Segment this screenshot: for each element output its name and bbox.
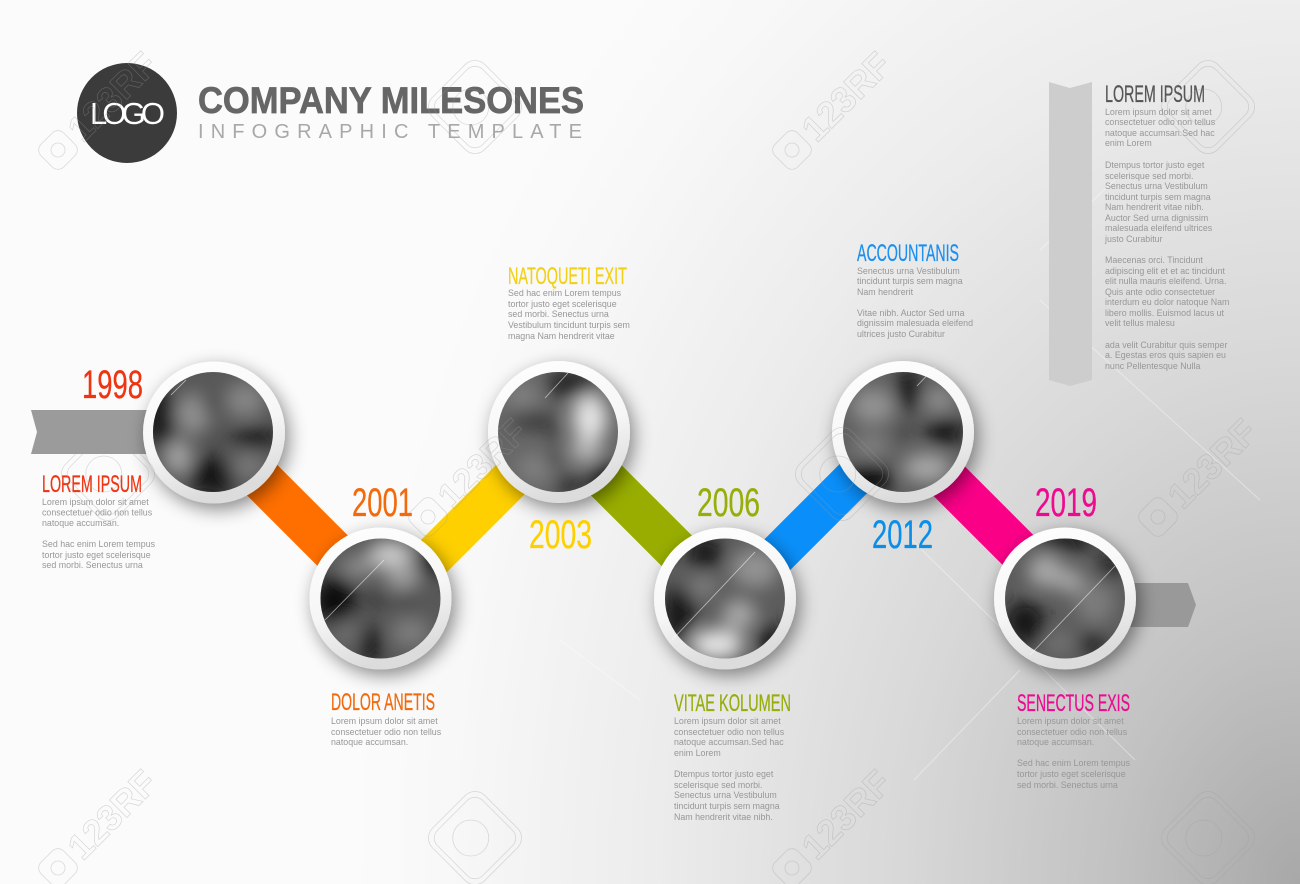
text block: accountanis: dignissim malesuada eleifend xyxy=(857,318,973,328)
text block: lorem ipsum: consectetuer odio non tellus xyxy=(42,508,153,518)
bar: green xyxy=(550,424,725,599)
text block: vitae kolumen: scelerisque sed morbi. xyxy=(674,780,762,790)
side body text: velit tellus malesu xyxy=(1105,318,1175,328)
side body text: scelerisque sed morbi. xyxy=(1105,171,1193,181)
text block: senectus exis: Sed hac enim Lorem tempus xyxy=(1017,758,1131,768)
milestone 2012 circle xyxy=(832,361,974,503)
text block: natoqueti exit xyxy=(508,263,632,341)
watermark overlay: 123RF xyxy=(429,411,535,516)
side body text: consectetuer odio non tellus xyxy=(1105,117,1216,127)
milestone 1998 circle xyxy=(143,362,285,504)
text block: lorem ipsum xyxy=(42,471,158,570)
bar: blue xyxy=(720,427,905,612)
text block: vitae kolumen: VITAE KOLUMEN xyxy=(674,690,791,717)
bar: pink xyxy=(900,432,1066,598)
text block: natoqueti exit: Vestibulum tincidunt turpis sem xyxy=(508,320,630,330)
text block: vitae kolumen: Lorem ipsum dolor sit amet xyxy=(674,716,781,726)
watermark overlay: 123RF xyxy=(793,44,899,149)
side body text: justo Curabitur xyxy=(1104,234,1163,244)
text block: vitae kolumen: Dtempus tortor justo eget xyxy=(674,769,774,779)
text block: vitae kolumen xyxy=(674,690,791,822)
text block: senectus exis: sed morbi. Senectus urna xyxy=(1017,780,1118,790)
year 2019: 2019 xyxy=(1035,481,1097,525)
text block: senectus exis: Lorem ipsum dolor sit amet xyxy=(1017,716,1124,726)
connector bars xyxy=(200,418,1066,615)
text block: vitae kolumen: enim Lorem xyxy=(674,748,721,758)
text block: vitae kolumen: Nam hendrerit vitae nibh. xyxy=(674,812,773,822)
milestone 2019 circle xyxy=(994,528,1136,670)
text block: lorem ipsum: LOREM IPSUM xyxy=(42,471,142,498)
text block: natoqueti exit: tortor justo eget scelerisque xyxy=(508,299,617,309)
text block: lorem ipsum: Sed hac enim Lorem tempus xyxy=(42,539,156,549)
text block: vitae kolumen: consectetuer odio non tellus xyxy=(674,727,785,737)
side body text: Lorem ipsum dolor sit amet xyxy=(1105,107,1212,117)
year 2003: 2003 xyxy=(529,513,592,557)
side body text: ada velit Curabitur quis semper xyxy=(1105,340,1227,350)
side body text: interdum eu dolor natoque Nam xyxy=(1105,297,1229,307)
text block: accountanis: Nam hendrerit xyxy=(857,287,914,297)
year 2012: 2012 xyxy=(872,513,933,557)
text block: lorem ipsum: Lorem ipsum dolor sit amet xyxy=(42,497,149,507)
bar: yellow xyxy=(375,420,570,615)
text block: dolor anetis: DOLOR ANETIS xyxy=(331,689,435,716)
text block: accountanis: ultrices justo Curabitur xyxy=(857,329,945,339)
milestone 2006 circle xyxy=(654,528,796,670)
text block: natoqueti exit: magna Nam hendrerit vitae xyxy=(508,331,615,341)
title: COMPANY MILESONES xyxy=(198,80,584,121)
side heading: LOREM IPSUM xyxy=(1105,81,1205,108)
text block: accountanis xyxy=(857,240,976,339)
milestone 2003 circle xyxy=(488,361,630,503)
side body text: Quis ante odio consectetuer xyxy=(1105,287,1215,297)
side body text: libero mollis. Euismod lacus ut xyxy=(1105,308,1224,318)
subtitle: INFOGRAPHIC TEMPLATE xyxy=(198,121,582,143)
text block: lorem ipsum: sed morbi. Senectus urna xyxy=(42,560,143,570)
side body text: nunc Pellentesque Nulla xyxy=(1105,361,1200,371)
watermark overlay: 123RF xyxy=(793,762,899,867)
side body text: a. Egestas eros quis sapien eu xyxy=(1105,350,1226,360)
text block: accountanis: tincidunt turpis sem magna xyxy=(857,276,963,286)
text block: vitae kolumen: natoque accumsan.Sed hac xyxy=(674,737,784,747)
side body text: Senectus urna Vestibulum xyxy=(1105,181,1208,191)
side body text: elit nulla mauris eleifend. Urna. xyxy=(1105,276,1226,286)
text block: senectus exis: natoque accumsan. xyxy=(1017,737,1094,747)
text block: accountanis: Vitae nibh. Auctor Sed urna xyxy=(857,308,965,318)
logo xyxy=(77,63,177,163)
text block: dolor anetis xyxy=(331,689,444,747)
side body text: tincidunt turpis sem magna xyxy=(1105,192,1211,202)
start ribbon xyxy=(31,410,160,454)
side body text: Dtempus tortor justo eget xyxy=(1105,160,1205,170)
watermark overlay: 123RF xyxy=(59,762,165,867)
text block: natoqueti exit: NATOQUETI EXIT xyxy=(508,263,627,290)
milestone 2001 circle xyxy=(310,528,452,670)
logo: LOGO xyxy=(90,96,165,131)
year 2001: 2001 xyxy=(352,481,413,525)
text block: senectus exis: consectetuer odio non tellus xyxy=(1017,727,1128,737)
text block: vitae kolumen: tincidunt turpis sem magna xyxy=(674,801,780,811)
side body text: Maecenas orci. Tincidunt xyxy=(1105,255,1203,265)
side body text: natoque accumsan.Sed hac xyxy=(1105,128,1215,138)
text block: senectus exis: SENECTUS EXIS xyxy=(1017,690,1130,717)
year 2006: 2006 xyxy=(697,481,760,525)
text block: dolor anetis: Lorem ipsum dolor sit amet xyxy=(331,716,438,726)
year 1998: 1998 xyxy=(82,363,143,407)
text block: dolor anetis: natoque accumsan. xyxy=(331,737,408,747)
side body text: enim Lorem xyxy=(1105,138,1152,148)
text block: lorem ipsum: tortor justo eget scelerisque xyxy=(42,550,151,560)
text block: senectus exis: tortor justo eget scelerisque xyxy=(1017,769,1126,779)
text block: accountanis: ACCOUNTANIS xyxy=(857,240,959,267)
watermark overlay: 123RF xyxy=(59,44,165,149)
side body text: Nam hendrerit vitae nibh. xyxy=(1105,202,1204,212)
watermark overlay: 123RF xyxy=(1159,411,1265,516)
side body text: adipiscing elit et et ac tincidunt xyxy=(1105,266,1225,276)
text block: natoqueti exit: Sed hac enim Lorem tempus xyxy=(508,288,622,298)
side text block xyxy=(1104,81,1232,371)
text block: lorem ipsum: natoque accumsan. xyxy=(42,518,119,528)
side ribbon xyxy=(1049,82,1092,386)
bar: orange xyxy=(200,418,380,598)
text block: senectus exis xyxy=(1017,690,1133,790)
end arrow xyxy=(1120,583,1196,627)
text block: dolor anetis: consectetuer odio non tellus xyxy=(331,727,442,737)
side body text: malesuada eleifend ultrices xyxy=(1105,223,1213,233)
text block: vitae kolumen: Senectus urna Vestibulum xyxy=(674,790,777,800)
text block: natoqueti exit: sed morbi. Senectus urna xyxy=(508,309,609,319)
side body text: Auctor Sed urna dignissim xyxy=(1105,213,1208,223)
text block: accountanis: Senectus urna Vestibulum xyxy=(857,266,960,276)
